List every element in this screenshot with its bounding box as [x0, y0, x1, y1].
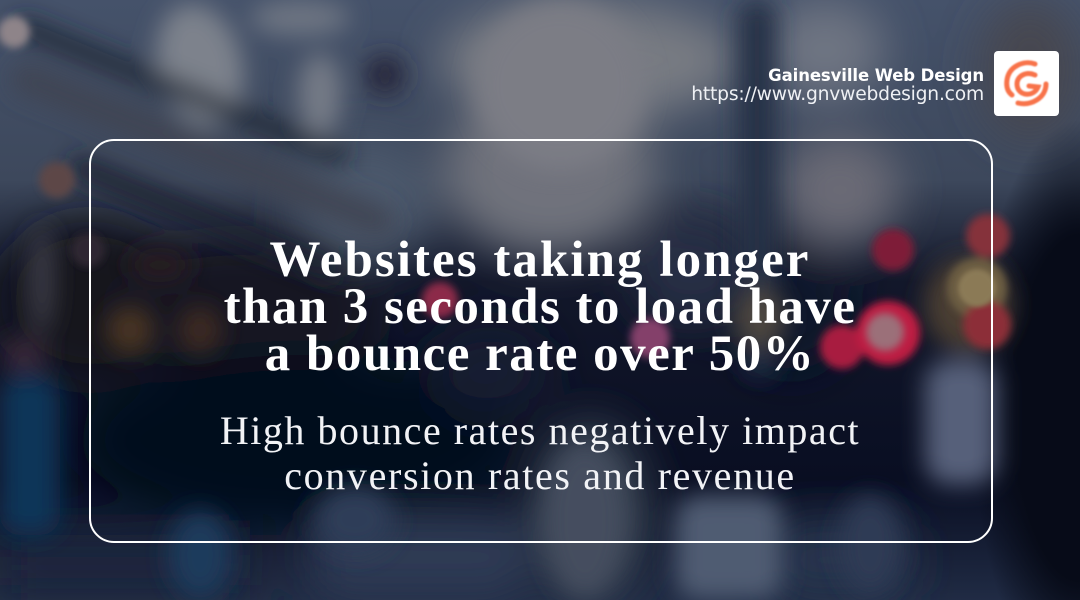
subheading: High bounce rates negatively impact [220, 408, 860, 453]
heading: a bounce rate over 50% [265, 326, 815, 382]
heading: than 3 seconds to load have [224, 279, 856, 335]
brand text: Gainesville Web Design [768, 66, 984, 85]
subheading: conversion rates and revenue [284, 453, 796, 498]
icon: company logo [994, 51, 1059, 116]
rounded outline frame [89, 139, 993, 543]
subheading [220, 408, 860, 498]
heading: Websites taking longer [270, 232, 810, 288]
brand text [691, 66, 984, 105]
brand text: https://www.gnvwebdesign.com [691, 84, 984, 105]
heading [224, 232, 856, 382]
